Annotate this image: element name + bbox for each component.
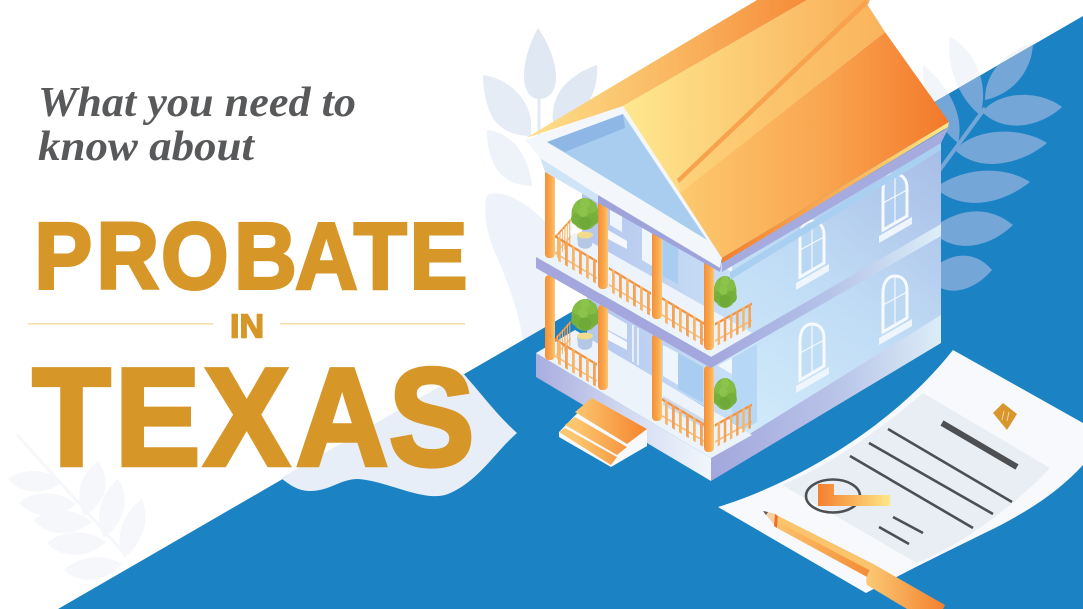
- lower columns: [545, 275, 714, 452]
- tree lower left: [571, 299, 599, 350]
- wall fascia: [722, 127, 949, 272]
- eave and pediment: [525, 105, 722, 272]
- decorative leaves: bottom left: [8, 435, 145, 580]
- railings lower: [555, 321, 752, 448]
- paper shaded band: [782, 393, 1050, 563]
- decorative leaves: top right, pale part on white: [923, 37, 1033, 143]
- under eave: [540, 157, 600, 204]
- document with checkmark: [718, 350, 1083, 593]
- upper columns: [545, 168, 714, 350]
- text lines: [850, 429, 1012, 544]
- window 1: [796, 221, 829, 290]
- heading line: [942, 423, 1017, 467]
- roof left strip: [526, 0, 807, 138]
- railings upper: [555, 219, 752, 347]
- tree lower right: [713, 378, 737, 410]
- paper sheet: [718, 350, 1083, 593]
- base: front face: [536, 353, 711, 481]
- roof band: [678, 4, 885, 193]
- divider with IN: IN: [230, 308, 264, 346]
- decorative leaves: behind house left: [483, 28, 597, 345]
- pediment: [547, 114, 707, 240]
- window 3: [796, 324, 829, 393]
- lower windows and door: [608, 313, 703, 403]
- potted trees: [571, 198, 737, 410]
- right wall windows: [796, 174, 912, 393]
- right wall: [711, 134, 941, 468]
- slab right face: [711, 224, 941, 368]
- upper floor: [536, 233, 752, 357]
- window 2: [879, 174, 912, 243]
- decorative leaves: right, over blue: [934, 45, 1062, 291]
- lavender beam: [598, 190, 722, 272]
- title TEXAS: TEXAS: [32, 340, 474, 495]
- steps: [559, 398, 647, 467]
- slab front face: [536, 257, 711, 368]
- upper slab top repeat edge and band: [536, 224, 941, 368]
- lower back wall: [587, 290, 732, 422]
- title PROBATE: PROBATE: [34, 204, 467, 309]
- pencil: [763, 511, 945, 609]
- roof main plane upper: [623, 0, 870, 258]
- lower floor: [536, 330, 752, 458]
- title intro line 1: What you need to: [38, 80, 356, 126]
- title intro line 2: know about: [38, 124, 255, 170]
- circled check: [806, 480, 890, 512]
- window 4: [879, 276, 912, 345]
- roof fold: [677, 0, 869, 183]
- base: right face: [711, 315, 941, 481]
- tree upper left: [571, 198, 599, 249]
- upper windows and door: [608, 208, 678, 284]
- roof edge: [722, 122, 949, 263]
- wave shape behind TEXAS: [281, 373, 517, 496]
- white eave band: [525, 105, 722, 268]
- side porch openings: [714, 258, 732, 345]
- roof: [526, 0, 949, 263]
- roof main plane lower: [680, 32, 949, 258]
- tree upper right: [713, 276, 737, 308]
- upper back wall: [582, 190, 732, 325]
- gold seal: [993, 403, 1017, 430]
- house: [525, 0, 949, 481]
